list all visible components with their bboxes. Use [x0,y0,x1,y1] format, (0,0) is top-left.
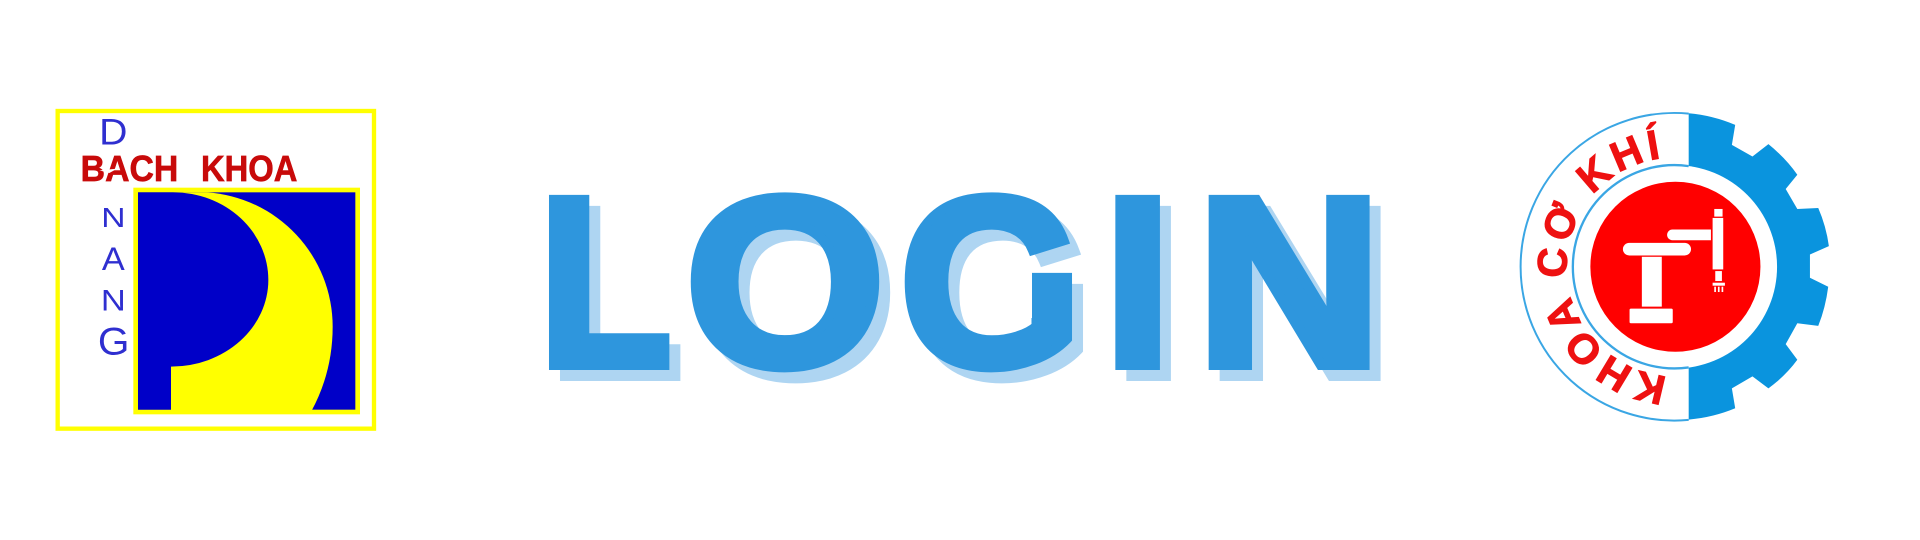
title main layer: I [1104,148,1171,416]
logo blue square with yellow border [136,190,358,412]
login banner canvas [56,108,1829,431]
logo red text: Bach Khoa: KHOA [201,148,297,189]
red centre disc [1590,182,1760,352]
icon: white robot arm [1623,209,1725,323]
logo outer yellow frame [58,111,374,429]
inner blue edge, left half [1573,165,1689,368]
logo: Bach Khoa Da Nang [58,111,374,429]
logo: Khoa Co Khi [1520,112,1829,422]
title shadow layer: I [1115,159,1182,427]
curved red text: Khoa Co Khi: KHOA CƠ KHÍ [1537,121,1666,406]
logo vertical text: Da Nang: D [99,112,127,153]
title shadow layer: N [1208,159,1392,427]
logo blue letter P [138,192,268,410]
title main layer: G [900,149,1082,417]
title main layer: L [539,149,672,416]
title main layer: N [1197,148,1381,416]
logo vertical text: Da Nang: N [101,284,126,317]
inner white disc [1574,165,1777,368]
title main layer [549,192,1370,372]
logo vertical text: Da Nang [98,112,129,363]
title main layer: O [686,147,885,416]
title: LOGIN [549,192,1381,384]
blue gear half [1689,113,1829,420]
title shadow layer: O [697,158,896,427]
outer thin ring, left half [1521,113,1689,421]
title shadow layer: L [550,160,683,427]
logo vertical text: Da Nang: N [101,202,125,233]
logo vertical text: Da Nang: G [98,321,129,363]
logo red text: Bach Khoa: BACH [81,148,178,189]
title shadow layer [560,206,1381,384]
logo vertical text: Da Nang: A [102,242,125,278]
logo yellow crescent [171,192,333,411]
logo red text: Bach Khoa [81,148,297,189]
title shadow layer: G [911,160,1093,428]
